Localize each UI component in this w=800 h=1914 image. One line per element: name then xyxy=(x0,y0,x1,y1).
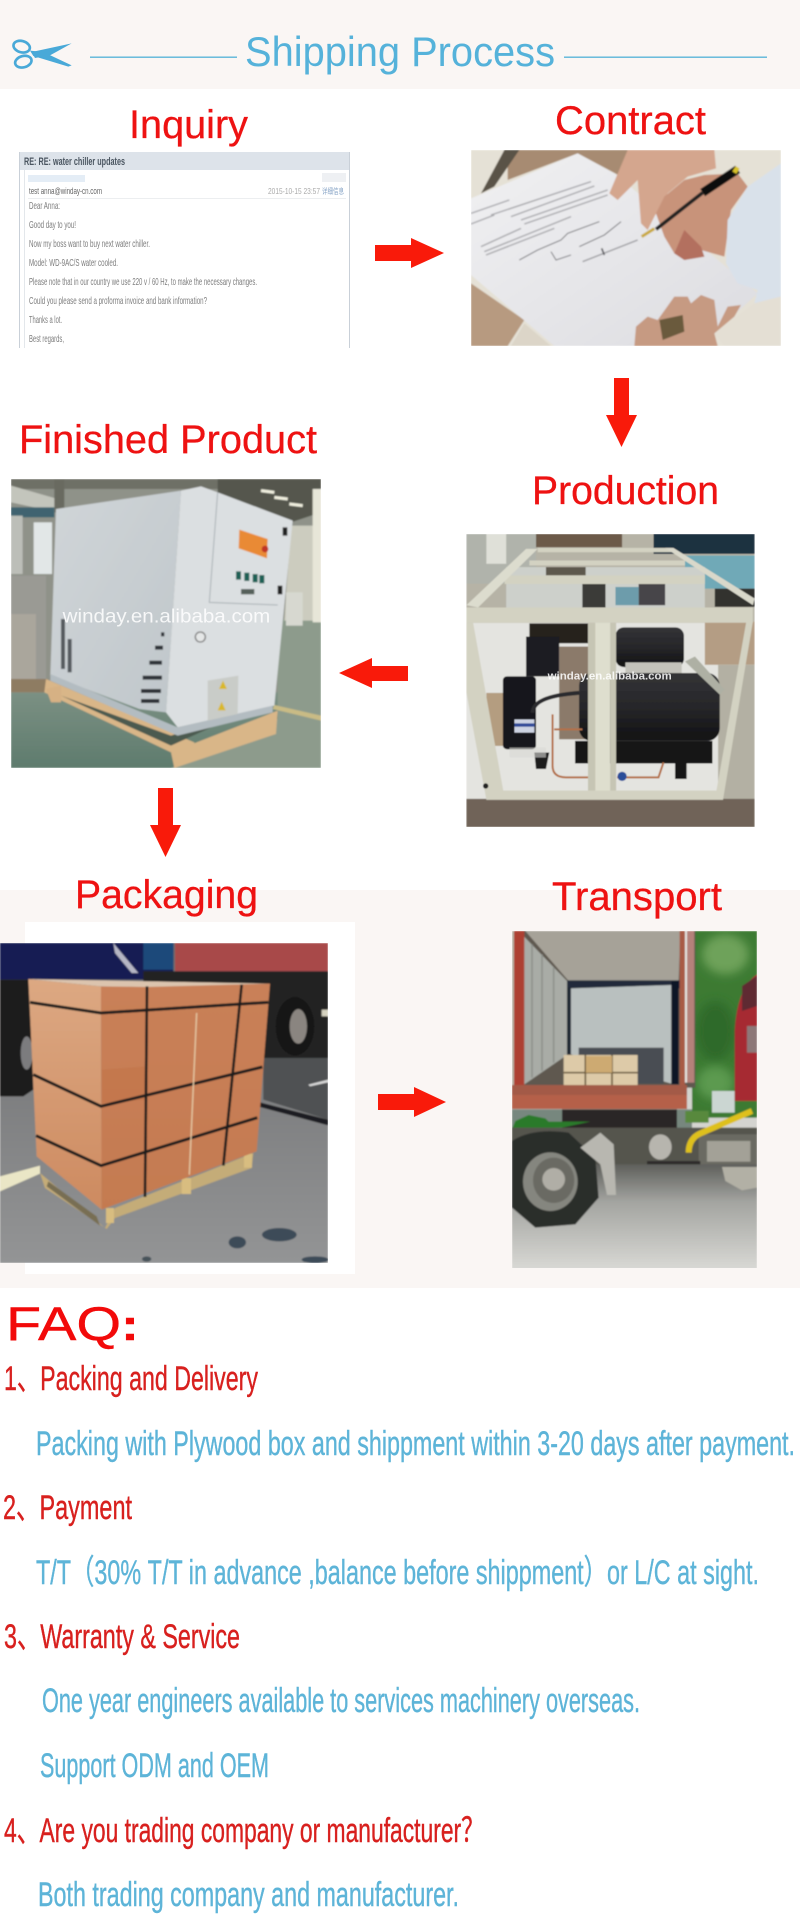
watermark: winday.en.alibaba.com xyxy=(62,606,270,627)
heading: Contract: Contract xyxy=(555,99,706,143)
answer 4: Both trading company and manufacturer. xyxy=(38,1876,459,1914)
panel: inquiry email screenshot: Thanks a lot. xyxy=(29,315,62,326)
question 4: 4、Are you trading company or manufacturer？ xyxy=(4,1812,484,1850)
panel: packaging white mat xyxy=(25,922,355,1274)
panel: inquiry email screenshot: Could you please send a proforma invoice and bank information? xyxy=(29,296,207,307)
watermark: winday.en.alibaba.com xyxy=(547,671,672,683)
panel: inquiry email screenshot: Now my boss want to buy next water chiller. xyxy=(29,239,150,250)
heading: Packaging: Packaging xyxy=(75,873,258,917)
icon: scissors xyxy=(12,39,72,69)
answer 3b: Support ODM and OEM xyxy=(40,1747,269,1785)
title: Shipping Process xyxy=(245,28,555,75)
panel: contract photo xyxy=(471,150,781,346)
band behind packaging and transport xyxy=(0,890,800,1288)
panel: inquiry email screenshot: RE: RE: water chiller updates xyxy=(24,156,125,168)
section: FAQ xyxy=(3,1297,795,1914)
question 3: 3、Warranty & Service xyxy=(4,1618,240,1656)
panel: production photo xyxy=(466,534,755,827)
arrow: finished product to packaging xyxy=(150,788,181,857)
left title rule xyxy=(90,56,237,58)
question 2: 2、Payment xyxy=(3,1489,132,1527)
arrow: packaging to transport xyxy=(378,1087,446,1117)
arrow: production to finished product xyxy=(339,658,408,688)
arrow: inquiry to contract xyxy=(375,238,444,268)
heading: Production: Production xyxy=(532,469,719,513)
heading: FAQ: FAQ : xyxy=(6,1297,139,1350)
question 1: 1、Packing and Delivery xyxy=(4,1360,258,1398)
panel: inquiry email screenshot: Model: WD-9AC/S water cooled. xyxy=(29,258,118,269)
panel: inquiry email screenshot: Best regards, xyxy=(29,334,64,345)
arrow: contract to production xyxy=(606,378,637,447)
panel: inquiry email screenshot xyxy=(19,152,350,348)
right title rule xyxy=(564,56,767,58)
panel: inquiry email screenshot: Good day to you! xyxy=(29,220,76,231)
heading: Transport: Transport xyxy=(552,875,722,919)
panel: finished product photo xyxy=(11,479,321,768)
panel: transport photo xyxy=(512,931,757,1268)
frame xyxy=(466,548,755,800)
panel: inquiry email screenshot: Dear Anna: xyxy=(29,201,60,212)
panel: inquiry email screenshot: 2015-10-15 23:57 xyxy=(268,186,320,196)
heading: Inquiry: Inquiry xyxy=(129,103,248,147)
panel: inquiry email screenshot: test anna@winday-cn.com xyxy=(29,186,102,196)
heading: Finished Product: Finished Product xyxy=(19,418,317,462)
header band xyxy=(0,0,800,89)
panel: packaging photo xyxy=(0,943,328,1263)
